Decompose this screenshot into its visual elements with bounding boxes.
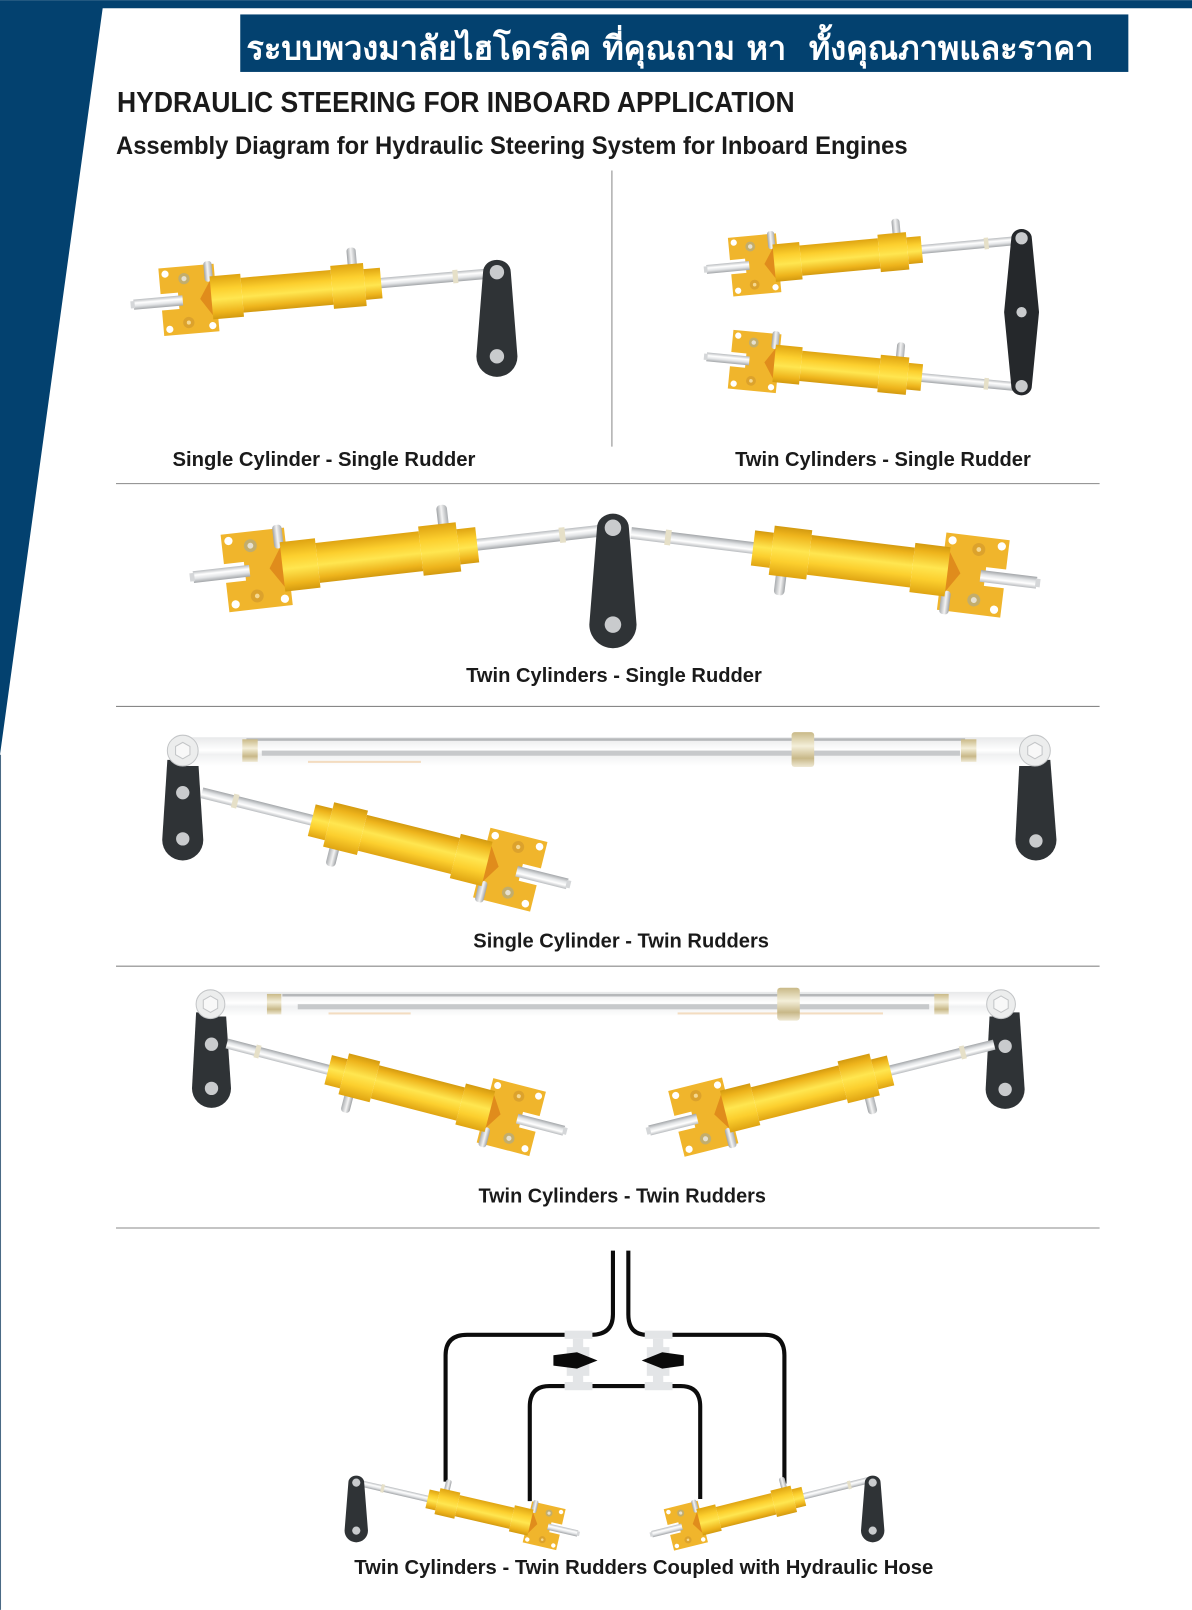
subheading: Assembly Diagram for Hydraulic Steering System for Inboard Engines [116, 133, 908, 160]
cylinder [127, 236, 491, 339]
left cylinder [218, 1011, 575, 1168]
tie bar [167, 732, 1050, 767]
rudder lever [476, 260, 517, 377]
right cylinder [626, 494, 1045, 627]
left navy wedge and top band [0, 0, 1192, 755]
caption: Twin Cylinders - Single Rudder [735, 448, 1031, 471]
caption: Single Cylinder - Single Rudder [172, 448, 475, 471]
upper cylinder [701, 208, 1017, 299]
panel: twin cylinders twin rudders coupled with hydraulic hose [345, 1251, 933, 1579]
title banner [240, 14, 1128, 72]
right cylinder [644, 1457, 874, 1555]
caption: Twin Cylinders - Single Rudder [466, 664, 762, 687]
panel: twin cylinders single rudder opposed [185, 487, 1045, 687]
left valve [553, 1331, 598, 1390]
caption: Twin Cylinders - Twin Rudders Coupled with Hydraulic Hose [354, 1556, 933, 1579]
lower cylinder [701, 324, 1017, 416]
left lever [192, 1012, 231, 1108]
caption: Single Cylinder - Twin Rudders [473, 930, 769, 953]
title banner: ระบบพวงมาลัยไฮโดรลิค ที่คุณถาม หา ทั้งคุณภาพและราคา [246, 24, 1093, 70]
heading: HYDRAULIC STEERING FOR INBOARD APPLICATION [117, 87, 795, 119]
right lever [986, 1012, 1025, 1109]
right valve [642, 1331, 684, 1390]
tie bar [196, 988, 1015, 1021]
left cylinder [358, 1461, 585, 1554]
right lever [1015, 760, 1056, 860]
right cylinder [638, 1012, 1003, 1168]
rudder lever [589, 514, 637, 648]
left lever [345, 1476, 368, 1542]
cylinder [192, 758, 579, 924]
hydraulic hoses [446, 1251, 784, 1501]
panel: single cylinder single rudder [127, 236, 517, 471]
caption: Twin Cylinders - Twin Rudders [478, 1184, 766, 1207]
panel: twin cylinders single rudder top right [701, 208, 1039, 471]
left lever [162, 760, 203, 860]
left cylinder [185, 487, 604, 616]
panel: single cylinder twin rudders [162, 732, 1056, 953]
double rudder lever [1004, 229, 1039, 395]
right lever [861, 1476, 884, 1542]
panel: twin cylinders twin rudders [192, 988, 1025, 1207]
